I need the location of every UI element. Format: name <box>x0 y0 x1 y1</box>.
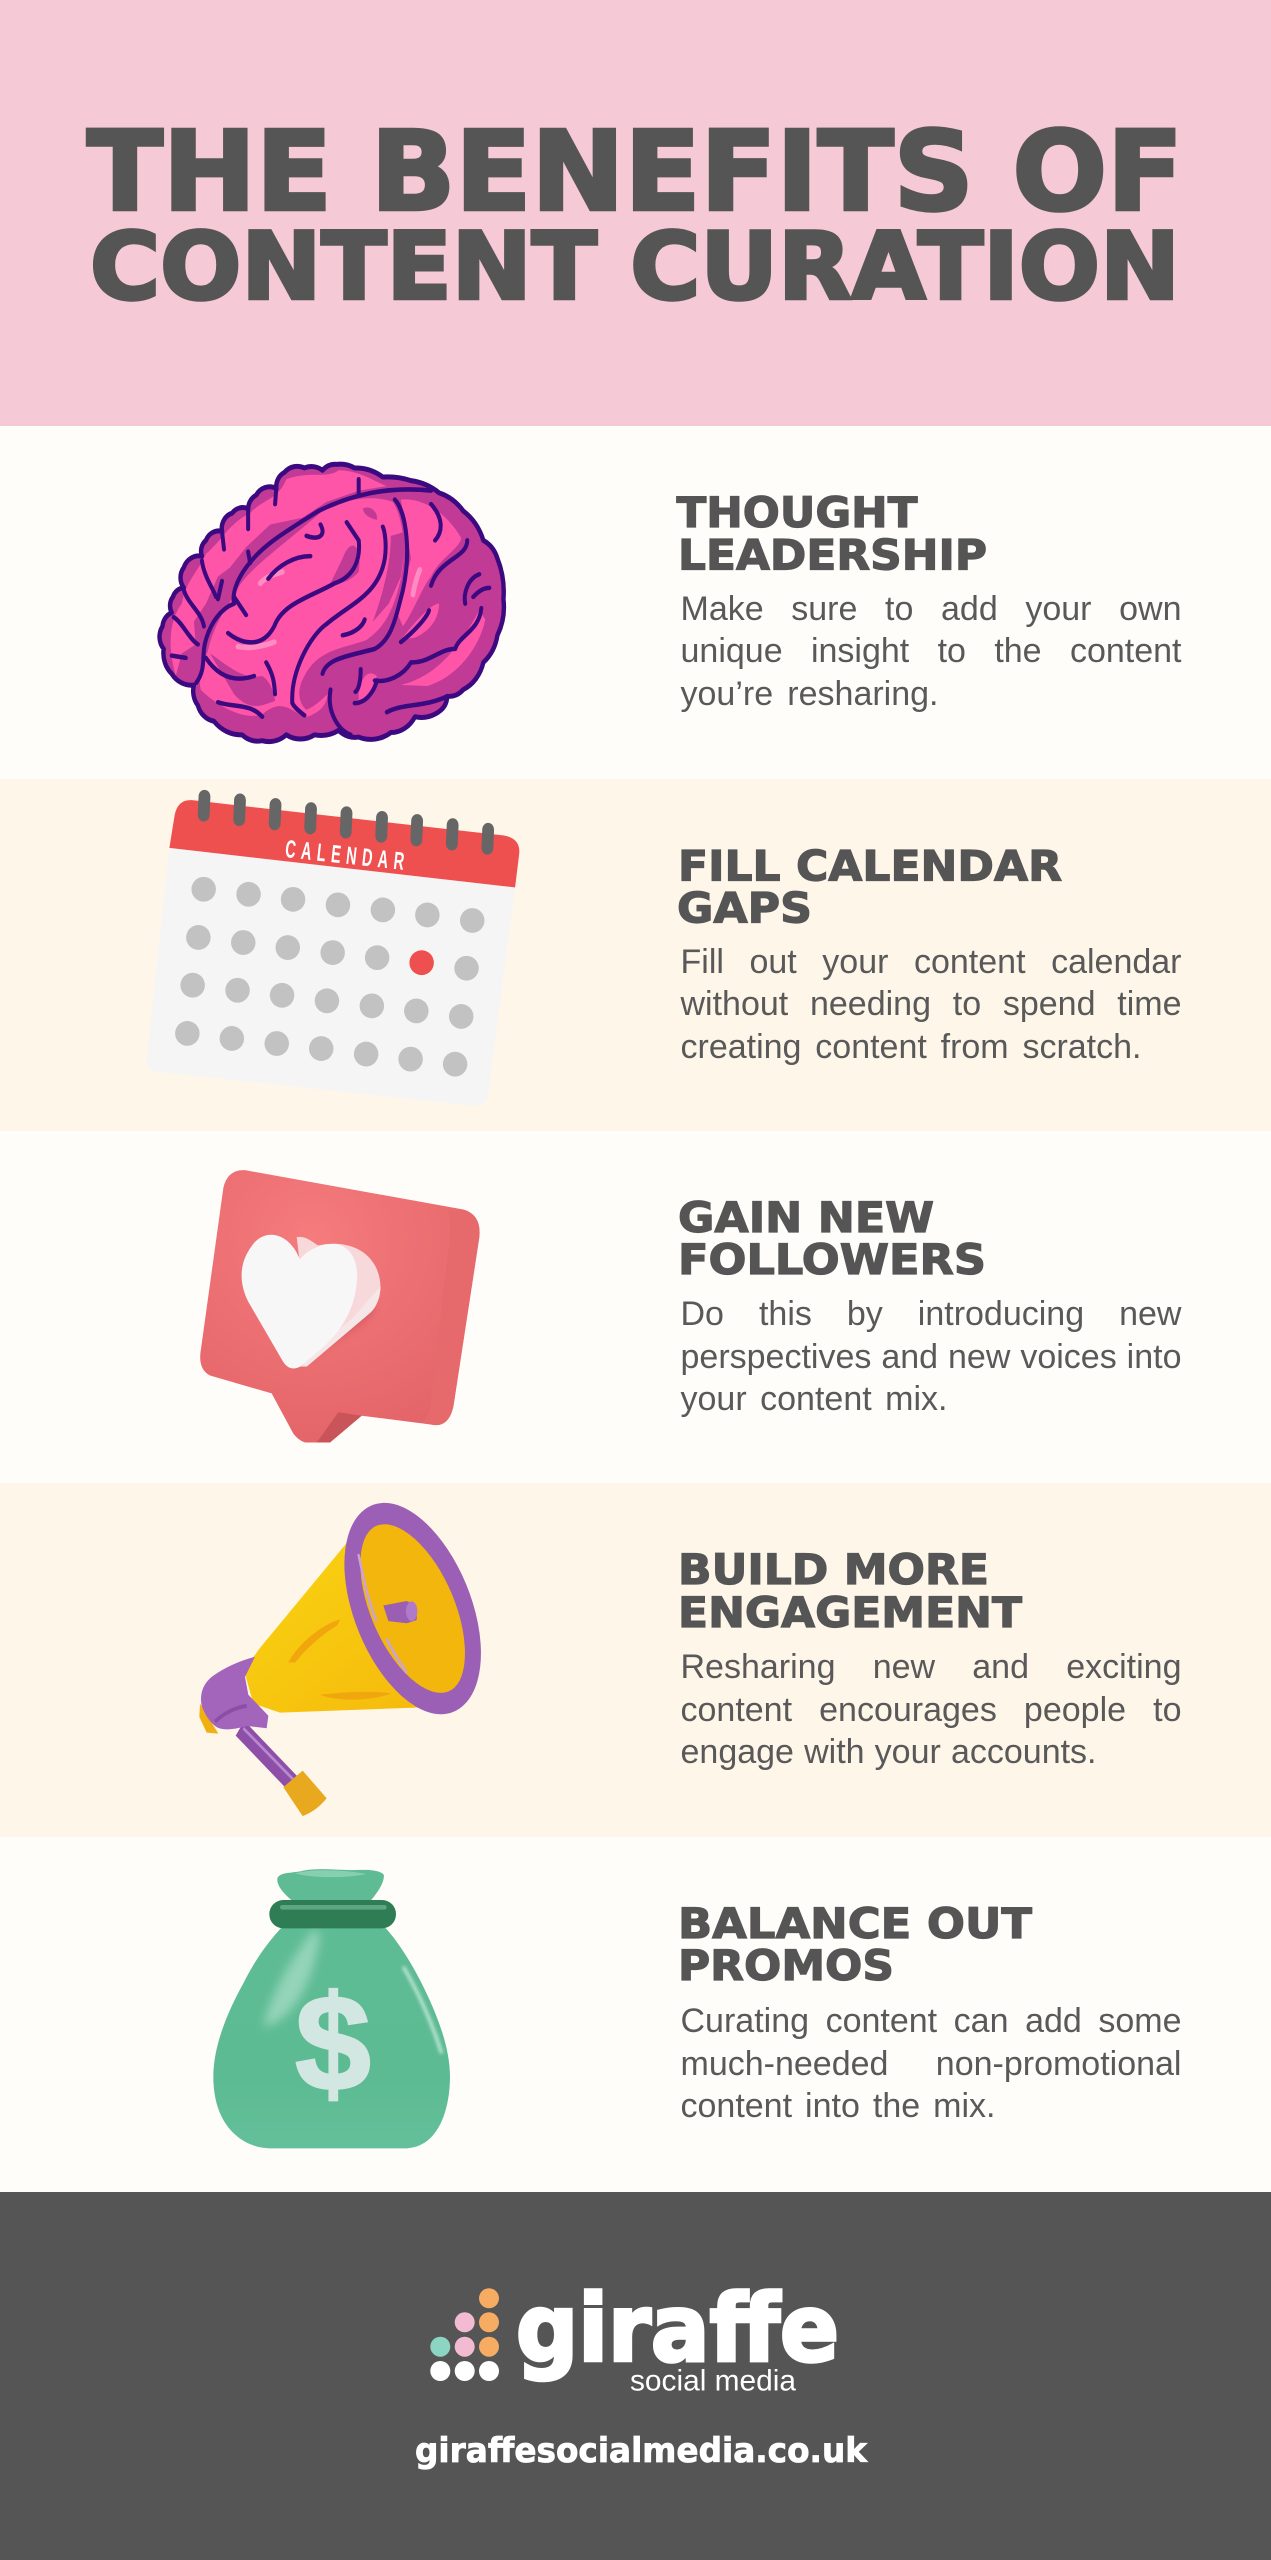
heading: thought leadership <box>676 488 987 580</box>
icon: megaphone <box>199 1502 481 1816</box>
text: gain new followers: Do this by introducing new <box>680 1295 1182 1333</box>
heading: thought leadership: LEADERSHIP <box>678 530 987 580</box>
text: balance out promos: much-needed non-promotional <box>680 2044 1182 2082</box>
text: fill calendar gaps: creating content from scratch. <box>680 1028 1142 1066</box>
icon: calendar: CALENDAR <box>284 836 406 876</box>
heading: build more engagement: ENGAGEMENT <box>678 1588 1022 1637</box>
text: thought leadership: unique insight to the content <box>680 632 1182 670</box>
text: fill calendar gaps: without needing to spend time <box>680 985 1182 1023</box>
header band <box>0 0 1271 426</box>
text: fill calendar gaps <box>680 942 1182 1066</box>
text: thought leadership: Make sure to add your own <box>680 590 1182 628</box>
website url: giraffesocialmedia.co.uk <box>415 2431 868 2471</box>
text: gain new followers: perspectives and new voices into <box>680 1338 1182 1376</box>
title: THE BENEFITS OF <box>87 108 1183 236</box>
footer <box>0 2192 1271 2560</box>
text: balance out promos: content into the mix. <box>680 2087 996 2125</box>
text: gain new followers <box>680 1295 1182 1418</box>
text: build more engagement: content encourages people to <box>680 1690 1182 1728</box>
icon: brain <box>157 462 506 744</box>
text: balance out promos <box>680 2002 1182 2125</box>
title: CONTENT CURATION <box>90 212 1180 320</box>
heading: fill calendar gaps: FILL CALENDAR <box>678 842 1062 890</box>
logo: wordmark: giraffe <box>516 2274 839 2382</box>
heading: build more engagement <box>678 1545 1022 1637</box>
heading: balance out promos: PROMOS <box>678 1941 894 1990</box>
text: build more engagement: engage with your accounts. <box>680 1733 1096 1771</box>
heading: thought leadership: THOUGHT <box>676 488 918 537</box>
heading: fill calendar gaps: GAPS <box>677 884 812 932</box>
text: thought leadership: you’re resharing. <box>680 674 938 712</box>
logo: social media: social media <box>630 2364 796 2398</box>
text: build more engagement <box>680 1648 1182 1771</box>
text: build more engagement: Resharing new and exciting <box>680 1648 1182 1686</box>
icon: heart speech bubble <box>200 1170 480 1442</box>
panel: build more engagement <box>0 1483 1271 1837</box>
icon: money bag <box>213 1869 450 2148</box>
text: thought leadership <box>680 590 1182 712</box>
text: fill calendar gaps: Fill out your content calendar <box>680 942 1182 980</box>
heading: gain new followers: GAIN NEW <box>678 1193 934 1242</box>
heading: balance out promos: BALANCE OUT <box>678 1899 1032 1948</box>
heading: fill calendar gaps <box>677 842 1062 932</box>
icon: money bag: $ <box>295 1967 371 2119</box>
heading: gain new followers: FOLLOWERS <box>678 1235 986 1284</box>
title <box>86 108 1183 320</box>
text: balance out promos: Curating content can add some <box>680 2002 1182 2040</box>
heading: gain new followers <box>678 1193 986 1284</box>
panel: balance out promos <box>0 1837 1271 2192</box>
text: gain new followers: your content mix. <box>680 1380 948 1418</box>
panel: gain new followers <box>0 1131 1271 1483</box>
heading: balance out promos <box>678 1899 1032 1990</box>
heading: build more engagement: BUILD MORE <box>678 1545 989 1594</box>
panel: thought leadership <box>0 426 1271 779</box>
logo: dot icon <box>430 2288 499 2381</box>
panel: fill calendar gaps <box>0 779 1271 1131</box>
icon: calendar <box>146 790 520 1106</box>
